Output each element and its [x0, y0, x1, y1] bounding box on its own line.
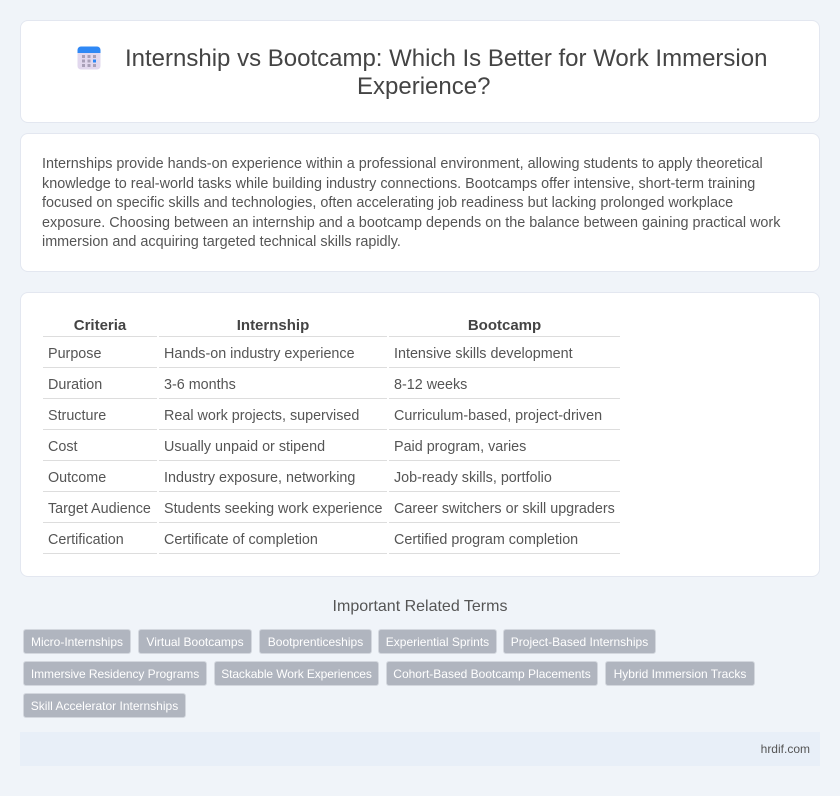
heading: related terms: Important Related Terms [333, 598, 507, 615]
text block: introduction [42, 156, 780, 250]
related terms tags: Bootprenticeships [268, 635, 363, 649]
comparison table: Intensive skills development [394, 346, 573, 362]
comparison table: Students seeking work experience [164, 500, 382, 516]
panel: introduction [20, 133, 820, 272]
comparison table: Certification [48, 532, 124, 548]
related terms tags: Virtual Bootcamps [146, 635, 244, 649]
comparison table: Certificate of completion [164, 532, 318, 548]
comparison table: Criteria [74, 317, 126, 334]
comparison table: Target Audience [48, 500, 151, 516]
related terms tags: Cohort-Based Bootcamp Placements [393, 667, 591, 681]
related terms tags: Micro-Internships [31, 635, 123, 649]
comparison table: Industry exposure, networking [164, 470, 355, 486]
title [125, 45, 767, 100]
text block: introduction: Internships provide hands-on experience within a professional environment, allowing students to apply theoretical [42, 156, 763, 172]
icon: calendar [78, 46, 100, 70]
comparison table: Purpose [48, 346, 101, 362]
comparison table: Curriculum-based, project-driven [394, 408, 602, 424]
comparison table: Cost [48, 438, 78, 454]
footer [20, 732, 820, 766]
comparison table: Internship [237, 317, 309, 334]
comparison table: Career switchers or skill upgraders [394, 500, 615, 516]
panel: header [20, 20, 820, 123]
comparison table: Usually unpaid or stipend [164, 438, 325, 454]
title: Experience? [357, 73, 490, 100]
comparison table: Bootcamp [468, 317, 541, 334]
related terms tags: Immersive Residency Programs [31, 667, 199, 681]
comparison table [43, 317, 620, 554]
related terms tags: Project-Based Internships [511, 635, 648, 649]
comparison table: Outcome [48, 470, 106, 486]
comparison table: Hands-on industry experience [164, 346, 355, 362]
comparison table: Paid program, varies [394, 438, 526, 454]
related terms tags: Stackable Work Experiences [221, 667, 372, 681]
text block: introduction: immersion and acquiring targeted technical skills rapidly. [42, 234, 401, 250]
title: Internship vs Bootcamp: Which Is Better for Work Immersion [125, 45, 767, 72]
text block: introduction: focused on specific skills and technologies, often accelerating job readiness but lacking prolonged workplace [42, 195, 733, 211]
comparison table: 8-12 weeks [394, 376, 467, 392]
comparison table: Real work projects, supervised [164, 408, 359, 424]
text block: introduction: knowledge to real-world tasks while building industry connections. Bootcamps offer intensive, short-term training [42, 176, 755, 192]
footer: hrdif.com [761, 742, 810, 756]
related terms tags: Hybrid Immersion Tracks [614, 667, 746, 681]
related terms tags: Experiential Sprints [386, 635, 489, 649]
related terms tags [23, 629, 755, 718]
related terms tags: Skill Accelerator Internships [31, 699, 178, 713]
comparison table: Duration [48, 376, 102, 392]
comparison table: Job-ready skills, portfolio [394, 470, 552, 486]
comparison table: Certified program completion [394, 532, 578, 548]
comparison table: Structure [48, 408, 106, 424]
comparison table: 3-6 months [164, 376, 236, 392]
panel: comparison table [20, 292, 820, 577]
text block: introduction: exposure. Choosing between an internship and a bootcamp depends on the balance between gaining practical work [42, 215, 780, 231]
